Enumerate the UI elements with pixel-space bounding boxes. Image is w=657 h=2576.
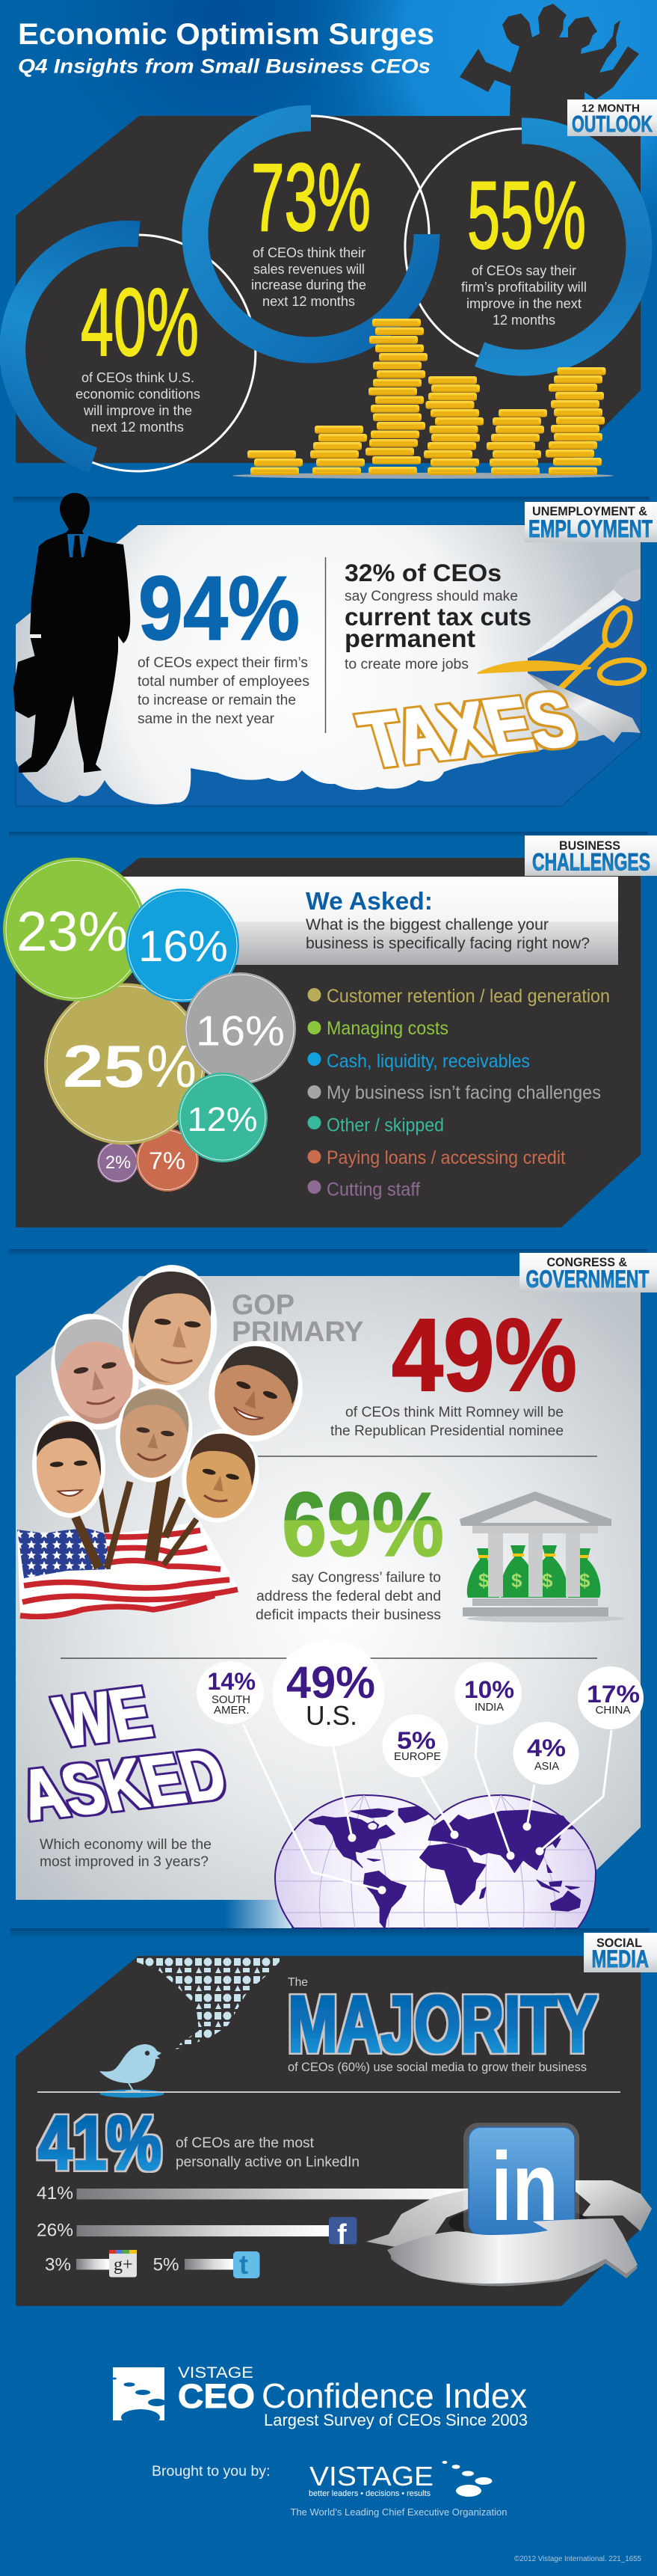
bubble: china 17% xyxy=(578,1666,644,1729)
logo wording: VISTAGE xyxy=(178,2364,253,2382)
icon: bank with money bags: $ xyxy=(579,1569,590,1592)
tag: business challenges xyxy=(525,835,657,876)
stat: 55%: firm’s profitability will xyxy=(461,279,587,295)
tag: 12 month outlook: 12 MONTH xyxy=(582,102,640,115)
stat: 55% xyxy=(461,162,587,328)
glow under panel xyxy=(224,1900,292,1928)
bar: facebook 26%: f xyxy=(337,2219,347,2251)
footer: vistage logo: VISTAGE xyxy=(309,2461,434,2491)
legend: Cash, liquidity, receivables xyxy=(327,1051,530,1072)
icon: bird xyxy=(99,2044,164,2097)
bubble: europe 5%: 5% xyxy=(397,1727,436,1754)
logo mark xyxy=(112,2367,166,2426)
bar: google plus 3%: g+ xyxy=(114,2255,133,2275)
stat: 41% linkedin: of CEOs are the most xyxy=(176,2135,315,2151)
stat: 94%: to increase or remain the xyxy=(138,692,296,708)
stat: 73%: sales revenues will xyxy=(253,261,365,277)
stat: 32% of CEOs: 32% of CEOs xyxy=(345,559,502,586)
legend: My business isn’t facing challenges xyxy=(327,1082,601,1103)
bar: twitter 5%: 5% xyxy=(153,2254,179,2275)
face: perry xyxy=(173,1422,268,1530)
icon: social icon funnel xyxy=(135,1956,285,2049)
section shadow xyxy=(13,497,650,504)
stat: 40% xyxy=(75,269,200,435)
we asked text: We Asked: xyxy=(306,887,433,915)
stat: 49% romney xyxy=(330,1298,577,1439)
footer: copyright: ©2012 Vistage International. 221_1655 xyxy=(514,2555,641,2563)
bubble: 16% blue xyxy=(126,889,239,1002)
bubble: 16% blue: 16% xyxy=(138,922,228,971)
stat: 73%: increase during the xyxy=(251,277,366,292)
footer: confidence index logo xyxy=(112,2364,528,2429)
circle rings xyxy=(13,116,639,471)
bubble: 25%: 25 xyxy=(63,1033,144,1100)
bubble: 12%: 12% xyxy=(187,1100,257,1138)
icon: bank with money bags: $ xyxy=(478,1569,490,1592)
panel: unemployment and employment xyxy=(13,493,646,806)
taxes lettering: TAXES xyxy=(351,676,584,783)
subtitle: Q4 Insights from Small Business CEOs xyxy=(18,55,431,78)
bubble: us 49% xyxy=(272,1640,384,1747)
divider xyxy=(37,2091,620,2093)
panel: social media xyxy=(16,1956,652,2306)
bubble: 23% xyxy=(3,857,146,1001)
bar: linkedin 41% xyxy=(37,2183,469,2204)
stat: 32% of CEOs: say Congress should make xyxy=(345,588,518,604)
bubble: 2% xyxy=(97,1141,138,1183)
stat: 69%: address the federal debt and xyxy=(256,1589,441,1604)
torn paper xyxy=(16,525,641,804)
panel background xyxy=(16,1276,641,1900)
icon: linkedin xyxy=(463,2123,579,2241)
legend: Other / skipped xyxy=(327,1114,444,1135)
peel corners xyxy=(528,589,624,658)
face: romney xyxy=(117,1261,222,1396)
panel background xyxy=(16,116,641,463)
face: gingrich xyxy=(42,1307,148,1437)
footer: confidence index logo: Confidence Index xyxy=(262,2376,527,2415)
bubble: 7% xyxy=(136,1129,199,1192)
footer: vistage logo xyxy=(309,2461,492,2498)
we asked lettering: ASKED xyxy=(11,1735,235,1835)
we asked lettering xyxy=(11,1673,235,1835)
we asked text xyxy=(306,887,590,952)
bubble: 25%: % xyxy=(146,1033,197,1100)
panel background xyxy=(16,1956,641,2306)
stat: 40%: of CEOs think U.S. xyxy=(81,369,194,385)
coin ground shadow xyxy=(232,473,614,479)
bar: twitter 5%: t xyxy=(239,2249,248,2280)
bubble: india 10%: INDIA xyxy=(475,1701,504,1714)
blue backing xyxy=(16,525,641,806)
paper cut wedge xyxy=(528,591,641,733)
bubble: india 10% xyxy=(454,1662,522,1725)
divider xyxy=(258,1456,597,1457)
icon: bank with money bags: $ xyxy=(511,1569,522,1592)
stat: 40%: economic conditions xyxy=(75,386,200,402)
bubble: us 49%: 49% xyxy=(286,1657,375,1708)
header background glow xyxy=(0,0,657,299)
bar: google plus 3% xyxy=(45,2250,137,2277)
icon: american flag xyxy=(17,1521,239,1620)
stat: 94%: total number of employees xyxy=(138,673,309,690)
legend xyxy=(308,986,610,1200)
we asked lettering: WE xyxy=(49,1673,158,1762)
bubble: south america 14%: 14% xyxy=(208,1668,256,1695)
footer: tagline: The World’s Leading Chief Executive Organization xyxy=(290,2506,507,2518)
footer: brought to you by: Brought to you by: xyxy=(152,2464,271,2480)
tag: congress and government xyxy=(519,1253,657,1292)
footer: confidence index logo: Largest Survey of CEOs Since 2003 xyxy=(264,2411,528,2429)
bar: facebook 26% xyxy=(37,2217,357,2251)
we asked text: What is the biggest challenge your xyxy=(306,916,549,933)
tag: social media xyxy=(584,1933,657,1972)
icon: silver arrows back xyxy=(366,2180,652,2254)
stat: 73% xyxy=(251,144,371,309)
icon: bank with money bags xyxy=(460,1491,624,1622)
legend: Cutting staff xyxy=(327,1179,420,1200)
tag: social media: SOCIAL xyxy=(596,1936,642,1950)
stat: 32% of CEOs: permanent xyxy=(345,625,475,652)
stat: 73%: of CEOs think their xyxy=(253,245,365,260)
question text: Which economy will be the xyxy=(40,1837,212,1853)
majority heading: of CEOs (60%) use social media to grow their business xyxy=(288,2061,587,2074)
stat: 41% linkedin xyxy=(38,2100,360,2186)
divider xyxy=(61,1657,597,1659)
bubble: 23%: 23% xyxy=(16,900,128,963)
stat: 40%: next 12 months xyxy=(91,419,184,435)
we asked text: business is specifically facing right now? xyxy=(306,934,590,952)
tag: 12 month outlook xyxy=(567,99,657,137)
stat: 49% romney: 49% xyxy=(392,1298,577,1413)
candidate sticks xyxy=(75,1469,197,1568)
divider xyxy=(324,557,326,733)
stat: 73%: 73% xyxy=(251,144,371,251)
stat: 69%: 69% xyxy=(282,1473,444,1575)
bubble: south america 14%: AMER. xyxy=(214,1704,250,1717)
bar: facebook 26%: 26% xyxy=(37,2220,73,2241)
bubble: 16% grey xyxy=(184,972,296,1085)
question banner xyxy=(120,877,618,965)
bubble: 2%: 2% xyxy=(105,1153,131,1173)
legend: Paying loans / accessing credit xyxy=(327,1147,566,1168)
stat: 49% romney: the Republican Presidential nominee xyxy=(330,1423,564,1439)
bubble: south america 14%: SOUTH xyxy=(212,1693,250,1706)
stat: 94%: of CEOs expect their firm’s xyxy=(138,654,308,671)
stat: 55%: improve in the next xyxy=(466,295,582,311)
bubble: europe 5%: EUROPE xyxy=(394,1750,441,1763)
icon: silver arrow front xyxy=(387,2218,638,2286)
tag: unemployment and employment: UNEMPLOYMENT & xyxy=(532,505,647,518)
stat: 32% of CEOs: current tax cuts xyxy=(345,603,531,631)
icon: business people silhouette xyxy=(460,4,639,117)
bubble: 12% xyxy=(178,1073,268,1162)
bubble: 16% grey: 16% xyxy=(196,1007,285,1055)
section shadow xyxy=(9,832,648,838)
panel: business challenges xyxy=(3,857,641,1227)
legend: Customer retention / lead generation xyxy=(327,986,610,1007)
bubble: 25% xyxy=(44,983,206,1144)
face: santorum xyxy=(30,1414,108,1519)
man silhouette xyxy=(13,493,130,773)
bubble: 7%: 7% xyxy=(149,1147,185,1174)
icon: linkedin: in xyxy=(491,2132,558,2241)
bubble: europe 5% xyxy=(383,1714,448,1777)
stat: 41% linkedin: personally active on LinkedIn xyxy=(176,2154,360,2171)
stat: 73%: next 12 months xyxy=(262,293,355,309)
stat: 55%: of CEOs say their xyxy=(472,263,576,278)
question text: most improved in 3 years? xyxy=(40,1854,209,1870)
coin stacks xyxy=(247,319,605,475)
footer: vistage logo: better leaders • decisions • results xyxy=(309,2489,431,2498)
bubble: asia 4%: ASIA xyxy=(534,1760,559,1773)
footer: confidence index logo: CEO xyxy=(178,2377,255,2415)
stat: 94% xyxy=(138,557,309,727)
bar: linkedin 41%: 41% xyxy=(37,2183,73,2204)
section shadow xyxy=(10,1928,650,1939)
bubble: china 17%: CHINA xyxy=(595,1704,631,1717)
bubble: asia 4%: 4% xyxy=(527,1735,566,1761)
bubble: asia 4% xyxy=(513,1722,579,1785)
scissors xyxy=(478,604,646,699)
stat: 40%: will improve in the xyxy=(83,402,192,418)
majority heading: The xyxy=(288,1976,308,1989)
stat: 55%: 55% xyxy=(467,162,586,269)
stat: 69% xyxy=(256,1473,444,1623)
panel: 12 month outlook xyxy=(13,116,641,479)
gop primary heading: GOP xyxy=(232,1289,294,1321)
tag: business challenges: BUSINESS xyxy=(559,839,620,853)
bubble: us 49%: U.S. xyxy=(306,1700,357,1731)
stat: 94%: same in the next year xyxy=(138,711,274,727)
stat: 41% linkedin: 41% xyxy=(38,2100,161,2186)
legend: Managing costs xyxy=(327,1018,448,1039)
stat: 40%: 40% xyxy=(81,269,199,376)
connector dots xyxy=(348,1822,544,1894)
face: huntsman xyxy=(194,1328,317,1455)
bar: twitter 5% xyxy=(153,2249,260,2280)
tag: congress and government: CONGRESS & xyxy=(547,1256,627,1269)
gop primary heading xyxy=(232,1289,363,1348)
panel: congress and government xyxy=(11,1261,644,1928)
stat: 49% romney: of CEOs think Mitt Romney will be xyxy=(345,1405,564,1420)
stat: 32% of CEOs: to create more jobs xyxy=(345,656,469,672)
connector lines xyxy=(243,1724,611,1890)
panel background xyxy=(16,858,641,1227)
bubble: south america 14% xyxy=(197,1661,264,1724)
stat: 69%: deficit impacts their business xyxy=(256,1607,441,1623)
section shadow xyxy=(9,1249,648,1256)
icon: bank with money bags: $ xyxy=(542,1569,553,1592)
stat: 69%: say Congress’ failure to xyxy=(292,1570,441,1586)
globe xyxy=(275,1795,596,1928)
title: Economic Optimism Surges xyxy=(18,18,434,51)
face: paul xyxy=(109,1379,199,1487)
bar: google plus 3%: 3% xyxy=(45,2254,71,2275)
stat: 94%: 94% xyxy=(138,557,300,659)
question text xyxy=(40,1837,212,1870)
gop primary heading: PRIMARY xyxy=(232,1316,363,1348)
bubble: china 17%: 17% xyxy=(587,1681,640,1708)
tag: unemployment and employment xyxy=(525,502,657,542)
bubble: india 10%: 10% xyxy=(464,1676,514,1703)
stat: 32% of CEOs xyxy=(345,559,531,672)
stat: 55%: 12 months xyxy=(493,312,555,328)
